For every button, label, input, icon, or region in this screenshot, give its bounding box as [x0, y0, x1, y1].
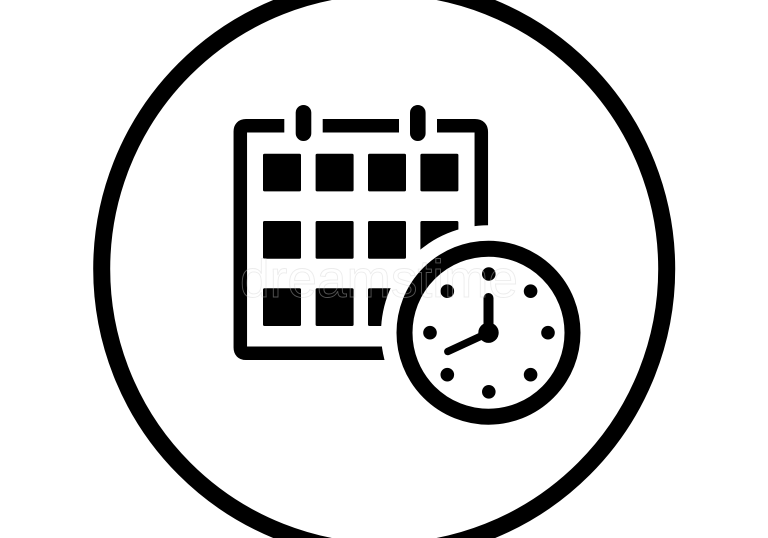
watermark: dreamstime: [240, 250, 518, 309]
clock white halo: [381, 225, 596, 440]
calendar binding rings: [296, 105, 426, 141]
calendar day grid: [263, 154, 458, 326]
clock hands: [448, 298, 499, 352]
calendar frame: [240, 126, 481, 353]
clock hour dots: [423, 267, 555, 399]
outer circle ring: [102, 0, 667, 538]
clock rim: [404, 249, 572, 417]
clock: [381, 225, 596, 440]
calendar: [240, 105, 481, 353]
